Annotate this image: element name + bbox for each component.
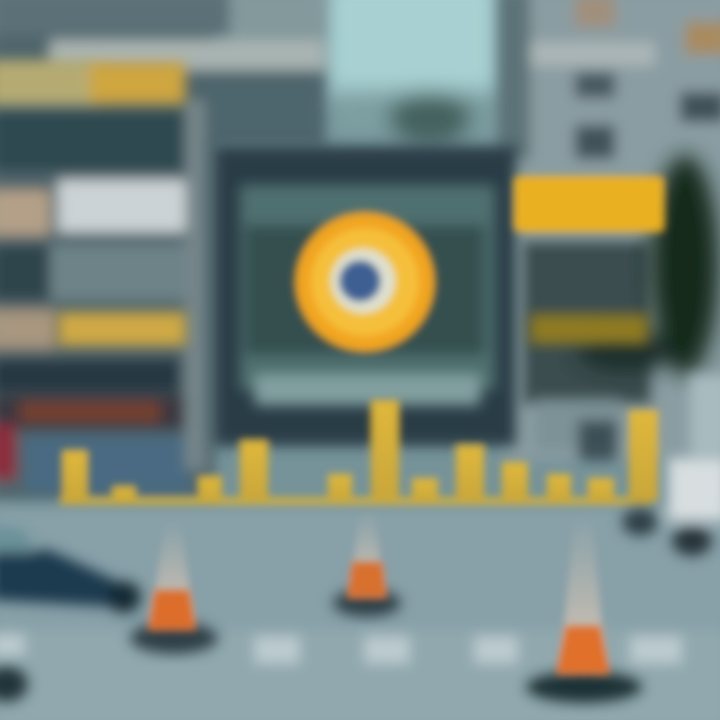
left building [0,0,325,500]
traffic cone, left [130,525,218,654]
dark car, left [0,525,141,702]
traffic cone, centre [333,515,401,617]
sky and distant trees [325,0,500,144]
white vehicle, right [622,375,720,556]
yellow lettering, right [530,314,648,344]
right side dark tree [577,155,719,375]
road [0,508,720,720]
yellow barrier row [60,400,658,505]
yellow circular badge [295,212,435,352]
left building yellow signs [0,60,186,346]
yellow sign, right [514,176,664,232]
road crossing marks [0,634,682,664]
central billboard frame [214,146,516,446]
right building [498,0,720,460]
billboard screen [240,185,495,405]
traffic cone, right [526,520,642,703]
